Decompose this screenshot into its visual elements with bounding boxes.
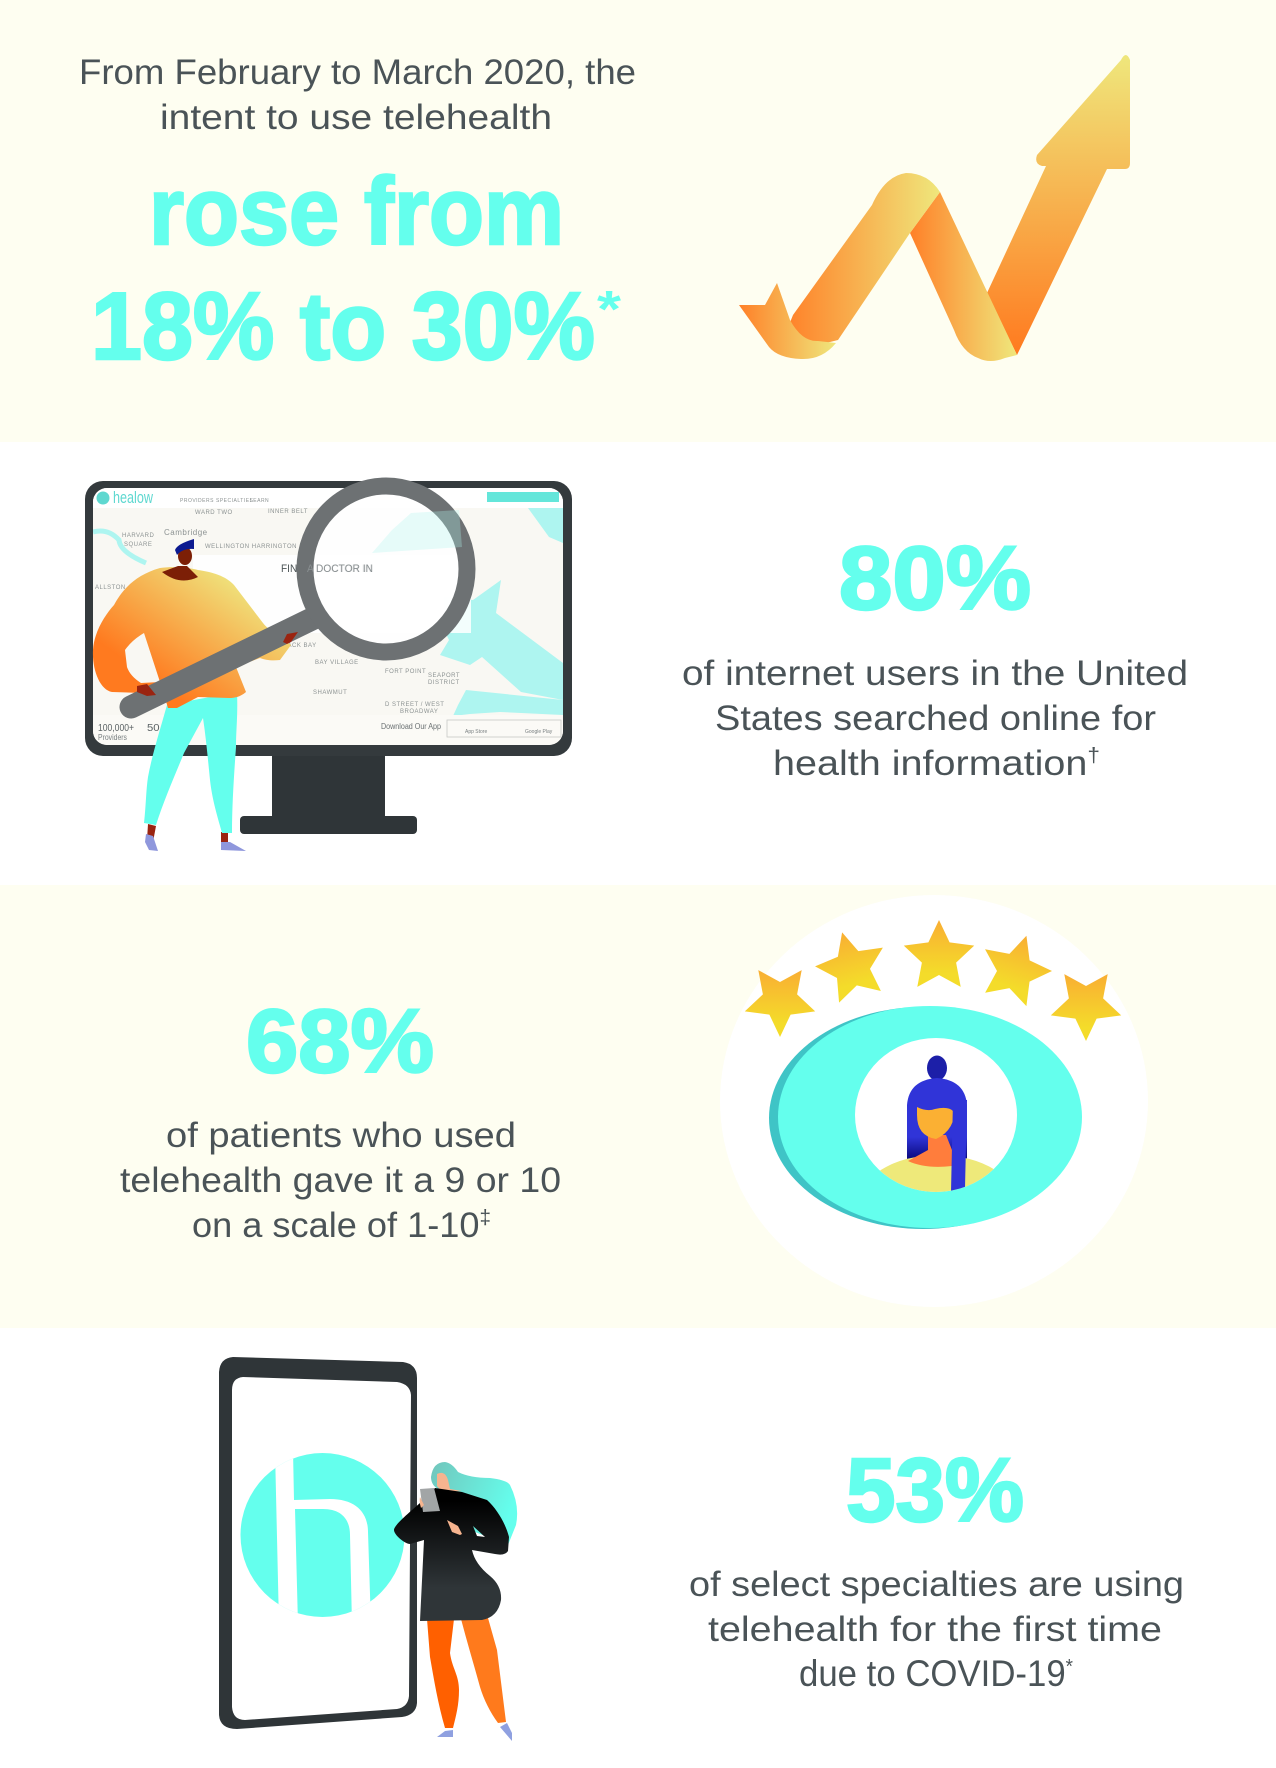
monitor screen: map: WELLINGTON HARRINGTON [205, 544, 297, 550]
text: internet users: of internet users in the United [682, 654, 1188, 693]
text: select specialties: telehealth for the first time [708, 1610, 1162, 1649]
stat: 53%: 53% [846, 1441, 1024, 1541]
headline: rose from 18% to 30% [91, 158, 622, 380]
monitor screen: map: INNER BELT [268, 509, 308, 515]
healow logo [240, 1450, 404, 1625]
icon: phone with healow logo and woman [219, 1357, 517, 1741]
person: head [162, 539, 198, 581]
monitor screen: map [93, 488, 563, 745]
text: internet users [682, 654, 1188, 783]
magnifying glass [131, 486, 467, 707]
woman: face [437, 1473, 462, 1492]
stat: 68%: 68% [246, 992, 434, 1092]
text: internet users: health information [773, 744, 1051, 783]
text: internet users: † [1087, 745, 1100, 767]
woman: hand [420, 1497, 462, 1535]
monitor screen: map: healow [113, 488, 154, 507]
icon: monitor with healow site and person with magnifier [85, 481, 572, 851]
monitor screen: map: Cambridge [164, 528, 208, 537]
monitor screen: map: SHAWMUT [313, 690, 347, 696]
text: patients rating: ‡ [480, 1207, 491, 1229]
intro text: intent to use telehealth [160, 98, 552, 137]
text: select specialties: of select specialties are using [689, 1565, 1184, 1604]
eye [769, 1006, 1082, 1229]
stat: 80%: 80% [839, 529, 1031, 629]
monitor screen: map: App Store [465, 729, 487, 735]
intro text [79, 53, 636, 137]
monitor screen: map: SPECIALTIES [216, 498, 254, 504]
monitor screen: map: D STREET / WEST [385, 702, 444, 708]
monitor screen: map: Google Play [525, 729, 553, 735]
background band: rating section [0, 885, 1276, 1328]
monitor screen: map: 50,0 [147, 723, 169, 734]
woman: dress [394, 1488, 509, 1621]
monitor screen: map: WARD TWO [195, 510, 233, 516]
text: select specialties: * [1066, 1656, 1073, 1678]
monitor screen: map: SQUARE [124, 542, 152, 548]
monitor screen: map: 100,000+ [98, 723, 134, 734]
monitor screen: map: HARVARD [122, 533, 154, 539]
background band: search section [0, 442, 1276, 885]
person: legs [144, 692, 237, 833]
monitor screen: map: DISTRICT [428, 680, 460, 686]
woman: tablet [420, 1488, 440, 1512]
icon: eye with five stars and patient [720, 895, 1148, 1307]
monitor screen: map: BACK BAY [283, 643, 317, 649]
headline: rose from 18% to 30%: rose from [149, 158, 564, 265]
magnifying glass: A DOCTOR IN [307, 563, 373, 575]
white circle backdrop [720, 895, 1148, 1307]
monitor screen: map: PROVIDERS [180, 498, 214, 504]
phone frame [219, 1357, 417, 1729]
monitor screen: map: BROADWAY [400, 709, 438, 715]
headline: rose from 18% to 30%: * [597, 281, 622, 339]
monitor screen: map: ALLSTON [95, 585, 126, 591]
patient portrait [880, 1056, 994, 1192]
person: feet and socks [145, 824, 246, 851]
text: internet users: States searched online for [715, 699, 1156, 738]
background band: specialties section [0, 1328, 1276, 1768]
five stars [745, 920, 1121, 1041]
text: patients rating: on a scale of 1-10 [192, 1206, 470, 1245]
monitor screen: map: LEARN [250, 498, 269, 504]
monitor screen: map: SEAPORT [428, 673, 460, 679]
monitor screen: map: BAY VILLAGE [315, 660, 359, 666]
background band: rise section [0, 0, 1276, 442]
person: hands [137, 632, 298, 696]
person: orange sweater [93, 567, 291, 708]
monitor screen: map: FIND A DOCTOR IN [281, 563, 372, 575]
text: select specialties: due to COVID-19 [799, 1653, 1083, 1694]
monitor screen: map: FORT POINT [385, 669, 426, 675]
intro text: From February to March 2020, the [79, 53, 636, 92]
text: patients rating: telehealth gave it a 9 or 10 [120, 1161, 561, 1200]
icon: rising ribbon arrow [739, 55, 1130, 361]
monitor screen: map: Download Our App [381, 722, 441, 731]
monitor stand [240, 750, 417, 834]
woman: legs [427, 1618, 512, 1741]
text: patients rating: of patients who used [166, 1116, 516, 1155]
monitor frame [85, 481, 572, 756]
monitor screen: map: Providers [98, 733, 127, 742]
text: select specialties [689, 1565, 1184, 1694]
text: patients rating [120, 1116, 561, 1245]
woman: hair [431, 1462, 517, 1545]
headline: rose from 18% to 30%: 18% to 30% [91, 273, 595, 380]
